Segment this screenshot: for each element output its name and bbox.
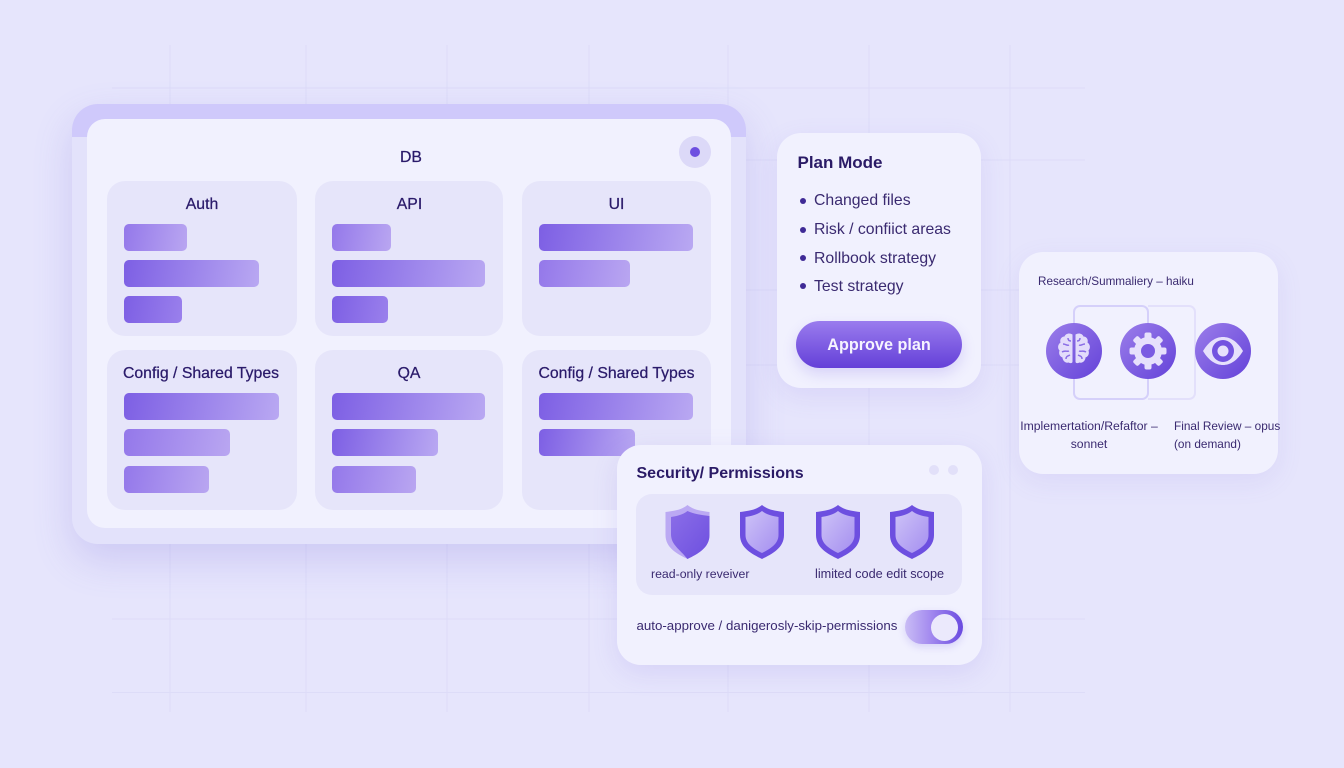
label: Auth: Auth — [186, 196, 218, 213]
label: API: API — [397, 196, 422, 213]
bars: Config — [124, 393, 279, 493]
toggle switch — [905, 610, 963, 644]
label: Final Review opus: Final Review – opus — [1174, 419, 1280, 433]
label: Config / Shared Types: Config / Shared Types — [123, 365, 279, 382]
item: Test strategy: Test strategy — [814, 278, 904, 295]
toggle knob — [931, 614, 958, 641]
card: UI — [522, 181, 711, 336]
panel: Plan Mode — [777, 133, 981, 388]
label: Implementation/Refactor sonnet: Implemertation/Refaftor – — [1020, 419, 1158, 433]
label: UI: UI — [609, 196, 624, 213]
panel top strip — [72, 104, 746, 137]
card: QA — [315, 350, 503, 510]
item: Changed files: Changed files — [814, 192, 911, 209]
label: read-only reveiver: read-only reveiver — [651, 567, 749, 581]
label: Config / Shared Types second: Config / Shared Types — [538, 365, 695, 382]
bars: UI — [539, 224, 693, 287]
checklist — [800, 192, 951, 295]
panel: Security / Permissions — [617, 445, 982, 665]
heading: DB: DB — [400, 149, 422, 166]
heading: Security / Permissions: Security/ Permissions — [636, 465, 804, 482]
label: Final Review opus — [1174, 419, 1280, 450]
label: Implementation/Refactor sonnet — [1020, 419, 1158, 450]
label: Implementation/Refactor sonnet: sonnet — [1071, 436, 1107, 450]
card: API — [315, 181, 503, 336]
icon: gear — [1120, 323, 1176, 379]
bars: Auth — [124, 224, 259, 323]
icon: eye — [1195, 323, 1251, 379]
bars: QA — [332, 393, 485, 493]
button: Approve plan — [796, 321, 962, 368]
icon: shields — [666, 505, 934, 559]
panel: model routing — [1019, 252, 1278, 474]
label: auto-approve toggle: auto-approve / danigerosly-skip-permissions — [636, 618, 897, 633]
shield tray — [636, 494, 962, 595]
panel inner surface — [87, 119, 731, 528]
label: QA: QA — [398, 365, 420, 382]
item: Rollbook strategy: Rollbook strategy — [814, 250, 936, 267]
card: Config / Shared Types (second) — [522, 350, 711, 510]
label: limited code edit scope: limited code edit scope — [815, 567, 944, 581]
label: Final Review opus: (on demand) — [1174, 436, 1241, 450]
bars: API — [332, 224, 485, 323]
button: Approve plan: Approve plan — [827, 336, 931, 354]
heading: Plan Mode: Plan Mode — [798, 153, 883, 172]
connector frames — [1073, 305, 1196, 400]
icon: brain — [1046, 323, 1102, 379]
panel: task board — [72, 104, 746, 544]
bars: Config second — [539, 393, 693, 456]
card: Auth — [107, 181, 297, 336]
status indicator — [679, 136, 711, 168]
card: Config / Shared Types — [107, 350, 297, 510]
label: Research/Summary haiku: Research/Summaliery – haiku — [1038, 275, 1194, 288]
item: Risk / conflict areas: Risk / confiict areas — [814, 221, 951, 238]
window dots — [929, 465, 958, 475]
